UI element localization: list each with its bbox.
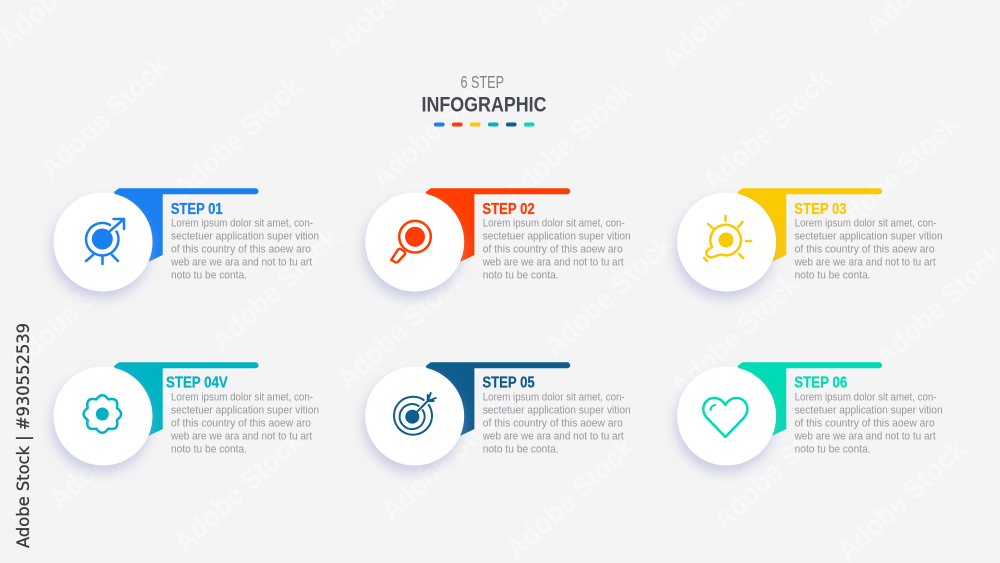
body text: of this country of this aoew aro — [171, 418, 311, 430]
body text — [482, 218, 631, 282]
icon: heart — [703, 398, 747, 437]
body text: Lorem ipsum dolor sit amet, con- — [483, 392, 625, 404]
body text: of this country of this aoew aro — [795, 244, 935, 256]
heading: STEP 03 — [794, 201, 847, 218]
colour dash legend — [434, 122, 534, 126]
panel: step 01 — [54, 188, 319, 292]
watermark pattern: Adobe Stock — [205, 222, 347, 357]
body text: Lorem ipsum dolor sit amet, con- — [795, 392, 937, 404]
body text: Lorem ipsum dolor sit amet, con- — [795, 218, 937, 230]
icon: target with arrow — [394, 393, 436, 435]
white circle — [677, 192, 776, 292]
body text: noto tu be conta. — [795, 444, 871, 456]
title: 6 step: 6 STEP — [460, 72, 504, 92]
watermark pattern: Adobe Stock — [500, 431, 642, 563]
watermark pattern: Adobe Stock — [538, 228, 680, 363]
body text: web are we ara and not to tu art — [794, 256, 936, 268]
watermark pattern: Adobe Stock — [707, 401, 849, 536]
heading: STEP 05 — [482, 375, 535, 392]
banner ribbon — [114, 362, 258, 437]
body text: web are we ara and not to tu art — [482, 430, 624, 442]
body text — [482, 392, 631, 456]
watermark pattern: Adobe Stock — [43, 381, 185, 516]
body text — [794, 218, 943, 282]
body text: sectetuer application super vition — [795, 404, 943, 416]
white circle — [677, 366, 776, 466]
title: infographic: INFOGRAPHIC — [422, 94, 546, 116]
body text: web are we ara and not to tu art — [794, 430, 936, 442]
body text: of this country of this aoew aro — [795, 418, 935, 430]
panel: step 04 — [54, 362, 319, 466]
body text: of this country of this aoew aro — [483, 418, 623, 430]
body text: sectetuer application super vition — [171, 230, 319, 242]
icon: magnifier — [391, 221, 431, 262]
white circle — [54, 192, 152, 292]
body text: web are we ara and not to tu art — [482, 256, 624, 268]
banner ribbon — [114, 188, 258, 263]
watermark pattern: Adobe Stock — [331, 261, 473, 396]
panel: step 06 — [677, 362, 943, 466]
heading: STEP 01 — [171, 201, 223, 218]
body text: noto tu be conta. — [795, 270, 871, 282]
body text: noto tu be conta. — [483, 270, 559, 282]
body text: web are we ara and not to tu art — [170, 430, 312, 442]
vertical stock id text: Adobe Stock | #930552539 — [14, 323, 34, 548]
white circle — [54, 366, 152, 466]
body text — [170, 392, 319, 456]
body text: sectetuer application super vition — [483, 230, 631, 242]
panel: step 05 — [365, 362, 631, 466]
watermark pattern: Adobe Stock — [375, 393, 517, 528]
body text: of this country of this aoew aro — [483, 244, 623, 256]
banner ribbon — [426, 188, 570, 263]
watermark pattern: Adobe Stock — [498, 75, 640, 210]
body text: sectetuer application super vition — [795, 230, 943, 242]
watermark pattern: Adobe Stock — [168, 424, 310, 559]
icon: gear badge — [84, 395, 121, 433]
body text: noto tu be conta. — [171, 444, 247, 456]
watermark pattern: Adobe Stock — [3, 242, 145, 377]
body text — [794, 392, 943, 456]
body text: Lorem ipsum dolor sit amet, con- — [171, 218, 313, 230]
body text — [170, 218, 319, 282]
watermark pattern: Adobe Stock — [825, 108, 967, 243]
banner ribbon — [738, 188, 882, 263]
heading: STEP 02 — [482, 201, 535, 218]
icon: male symbol target — [86, 219, 124, 264]
banner ribbon — [738, 362, 882, 437]
body text: noto tu be conta. — [483, 444, 559, 456]
body text: sectetuer application super vition — [171, 404, 319, 416]
watermark pattern: Adobe Stock — [168, 70, 310, 205]
white circle — [365, 192, 464, 292]
watermark pattern: Adobe Stock — [366, 60, 508, 195]
body text: sectetuer application super vition — [483, 404, 631, 416]
title block — [422, 72, 546, 126]
watermark pattern: Adobe Stock — [665, 268, 807, 403]
body text: Lorem ipsum dolor sit amet, con- — [483, 218, 625, 230]
panel: step 02 — [365, 188, 631, 292]
body text: of this country of this aoew aro — [171, 244, 311, 256]
watermark pattern: Adobe Stock — [34, 50, 176, 185]
heading: STEP 04V — [166, 375, 228, 392]
body text: web are we ara and not to tu art — [170, 256, 312, 268]
white circle — [365, 366, 464, 466]
body text: Lorem ipsum dolor sit amet, con- — [171, 392, 313, 404]
body text: noto tu be conta. — [171, 270, 247, 282]
banner ribbon — [426, 362, 570, 437]
panel: step 03 — [677, 188, 943, 292]
icon: light bulb — [704, 216, 751, 261]
watermark pattern: Adobe Stock — [697, 63, 839, 198]
heading: STEP 06 — [794, 375, 847, 392]
